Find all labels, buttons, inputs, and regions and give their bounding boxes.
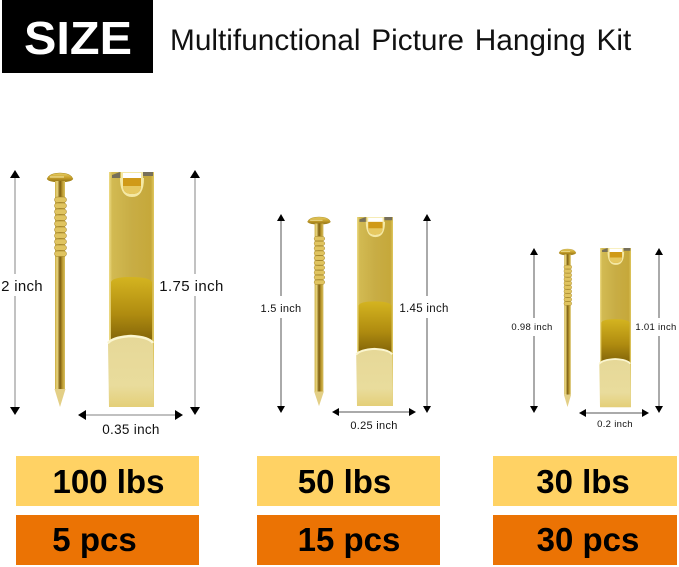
label: 100 lbs xyxy=(16,456,199,506)
label: 15 pcs: 15 pcs xyxy=(298,521,400,558)
icon: small hook xyxy=(599,248,631,407)
arrow: hook height 1.45 inch: 1.45 inch xyxy=(399,303,449,315)
arrow: hook height 1.01 inch xyxy=(635,248,677,413)
arrow: nail height 1.5 inch xyxy=(261,214,301,413)
arrow: nail height 2 inch xyxy=(1,170,43,415)
panel: small size set xyxy=(511,248,677,430)
label: 30 pcs: 30 pcs xyxy=(537,521,639,558)
label: 15 pcs xyxy=(257,515,440,565)
icon: medium nail xyxy=(308,217,331,406)
arrow: hook height 1.45 inch xyxy=(399,214,449,413)
panel: medium size set xyxy=(261,214,449,432)
icon: small nail xyxy=(559,249,576,407)
arrow: hook height 1.75 inch xyxy=(159,170,224,415)
label: 30 pcs xyxy=(493,515,677,565)
arrow: nail height 0.98 inch xyxy=(511,248,553,413)
label: 30 lbs xyxy=(493,456,677,506)
arrow: hook height 1.75 inch: 1.75 inch xyxy=(159,278,224,295)
arrow: hook width 0.25 inch xyxy=(332,408,416,432)
arrow: nail height 2 inch: 2 inch xyxy=(1,278,43,295)
icon: large hook xyxy=(108,172,154,407)
label: 30 lbs: 30 lbs xyxy=(536,463,630,500)
label: 50 lbs xyxy=(257,456,440,506)
arrow: nail height 1.5 inch: 1.5 inch xyxy=(261,303,301,315)
label: 5 pcs: 5 pcs xyxy=(52,521,137,558)
panel: large size set xyxy=(1,170,224,437)
badge: SIZE xyxy=(2,0,153,73)
icon: medium hook xyxy=(356,217,393,406)
arrow: hook width 0.35 inch xyxy=(78,410,183,437)
arrow: hook width 0.2 inch: 0.2 inch xyxy=(597,419,633,430)
badge: SIZE: SIZE xyxy=(24,12,132,64)
label: 100 lbs: 100 lbs xyxy=(53,463,164,500)
arrow: nail height 0.98 inch: 0.98 inch xyxy=(511,322,553,333)
icon: large nail xyxy=(47,173,73,407)
label: 5 pcs xyxy=(16,515,199,565)
arrow: hook width 0.25 inch: 0.25 inch xyxy=(350,420,398,432)
label: 50 lbs: 50 lbs xyxy=(298,463,391,500)
arrow: hook width 0.2 inch xyxy=(579,409,649,430)
title: Multifunctional Picture Hanging Kit xyxy=(170,24,632,57)
arrow: hook height 1.01 inch: 1.01 inch xyxy=(635,322,677,333)
arrow: hook width 0.35 inch: 0.35 inch xyxy=(102,422,160,437)
